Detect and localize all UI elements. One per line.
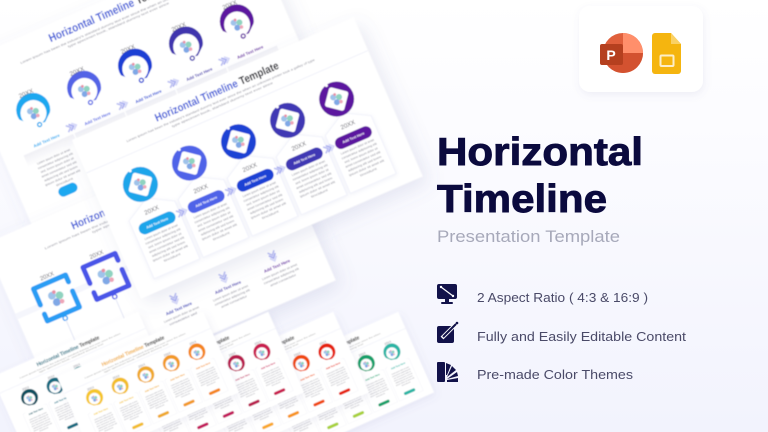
arrow 2 xyxy=(225,186,237,196)
step 5 xyxy=(307,73,396,193)
app logos card xyxy=(579,6,703,92)
main heading: Horizontal xyxy=(437,131,643,174)
main slide description: type specimen book, standard dummy text ever since xyxy=(171,81,274,128)
slide: small yellow theme xyxy=(57,312,239,432)
lower labels: Add Text Here xyxy=(165,300,193,316)
icon: square frame blue xyxy=(33,275,93,353)
lower labels: amet consectetur xyxy=(220,294,248,309)
icon: PowerPoint: P xyxy=(606,47,616,63)
arrow 1 xyxy=(176,207,188,217)
step 4 xyxy=(257,94,347,215)
lower labels: consectetur adipiscing elit xyxy=(263,267,300,285)
slide: middle left timeline with square icons xyxy=(0,122,336,403)
main slide description: Lorem ipsum has been the industry's standard dummy text ever since the when an unknown printer took a galley of type xyxy=(126,58,316,143)
step 1 xyxy=(110,158,200,279)
year label one: 20XX xyxy=(39,271,55,283)
slide: back top timeline with shield icons: type specimen book, standard dummy text ever since xyxy=(67,1,170,49)
slide: back top timeline with shield icons: Lorem ipsum has been the industry's standard dummy text ever since the when an unknown printer took a galley xyxy=(20,0,215,65)
lower labels: Add Text Here xyxy=(214,279,242,295)
slide: middle left timeline with square icons: type specimen book standard dummy text xyxy=(91,190,185,234)
lower labels: consectetur adipiscing elit xyxy=(214,288,251,307)
lower labels: amet consectetur xyxy=(269,273,297,288)
slide previews collage xyxy=(0,0,434,432)
arrow 4 xyxy=(323,143,335,153)
slide: middle left timeline with square icons: Horizontal Timeline Template xyxy=(70,168,196,232)
lower labels xyxy=(155,244,302,332)
feature: aspect ratio: 2 Aspect Ratio ( 4:3 & 16:9 ) xyxy=(477,290,648,305)
feature: color themes: Pre-made Color Themes xyxy=(477,367,634,382)
lower labels: Add Text Here xyxy=(263,258,291,274)
icon: pencil xyxy=(437,322,458,343)
icon: Google Slides xyxy=(652,33,681,74)
slide: small crimson theme xyxy=(122,312,304,432)
slide: main timeline with circle icons xyxy=(72,18,423,299)
icon: color fan xyxy=(437,362,458,382)
arrow 3 xyxy=(274,164,286,175)
main heading xyxy=(437,131,643,221)
lower labels: Lorem ipsum dolor sit amet xyxy=(163,305,200,324)
icon: square frame indigo xyxy=(83,253,143,331)
slide: small orange red theme xyxy=(187,312,369,432)
main slide description xyxy=(126,58,318,147)
subtitle: Presentation Template xyxy=(437,227,620,246)
lower labels: Lorem ipsum dolor sit amet xyxy=(261,262,298,281)
lower labels: Lorem ipsum dolor sit amet xyxy=(212,284,249,303)
main slide title: Horizontal Timeline Template xyxy=(153,60,281,124)
step 3 xyxy=(208,115,298,236)
lower labels: consectetur sed xyxy=(169,311,198,326)
slide: middle left timeline with square icons: Lorem ipsum has been the industry's standard dummy text ever since the when an unknown xyxy=(44,167,229,250)
icon: monitor xyxy=(437,284,457,304)
feature: editable content: Fully and Easily Editable Content xyxy=(477,329,686,344)
slide: small teal theme xyxy=(0,312,174,432)
year label two: 20XX xyxy=(89,250,105,261)
slide: back top timeline with shield icons xyxy=(0,0,324,227)
main heading: Timeline xyxy=(437,178,607,221)
slide: small green theme xyxy=(252,312,434,432)
step 2 xyxy=(159,137,249,257)
